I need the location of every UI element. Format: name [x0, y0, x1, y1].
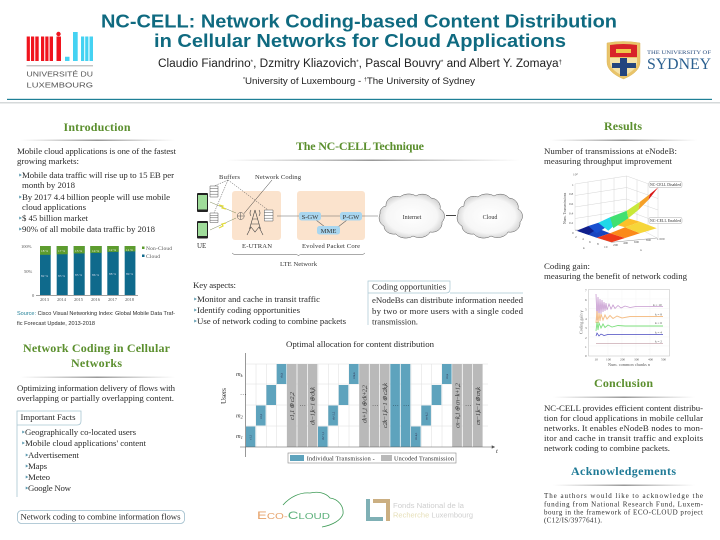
authors: , Dzmitry Kliazovich	[253, 58, 356, 70]
text: conclusion body: networks. It enables eNodeB nodes to mon-	[544, 423, 703, 433]
authors: *	[356, 60, 359, 66]
logo: University of Luxembourg: UNIVERSITÉ DU	[26, 70, 93, 78]
list: market facts: ‣	[18, 225, 23, 234]
list: key aspects: Identify coding opportunities	[197, 305, 301, 315]
bar chart: cloud vs non-cloud traffic: 83 %	[58, 274, 65, 278]
diagram labels: Buffers	[219, 174, 240, 181]
cell labels	[248, 372, 482, 440]
authors: *	[441, 60, 444, 66]
bar chart: cloud vs non-cloud traffic: 88 %	[109, 272, 116, 276]
line chart: coding gain: 500	[661, 358, 666, 362]
text: conclusion body	[544, 403, 704, 453]
bar chart: cloud vs non-cloud traffic: 0	[32, 293, 35, 298]
icon: network coding node	[237, 212, 244, 220]
line chart: coding gain: Num. common chunks n	[608, 362, 651, 367]
logo: University of Sydney: SYDNEY	[647, 56, 711, 73]
line chart: coding gain: 7	[585, 288, 587, 292]
diagram labels: Evolved Packet Core	[302, 243, 360, 250]
logo: Fonds National de la Recherche: Recherche Luxembourg	[393, 512, 473, 520]
cell labels: …	[392, 401, 399, 408]
line chart: coding gain: 6	[585, 298, 587, 302]
line chart: coding gain: 1	[585, 345, 587, 349]
bar chart: cloud vs non-cloud traffic: 2014	[57, 297, 67, 302]
text: conclusion body: tion for cloud applications in mobile cellular	[544, 413, 703, 423]
icon: buffers	[210, 186, 273, 222]
affiliations: University of Luxembourg -	[245, 76, 364, 87]
line chart: coding gain: 5	[585, 308, 587, 312]
chart axis labels: 800	[646, 238, 651, 242]
cloud: internet: Internet	[403, 215, 422, 221]
chart axis labels: n	[640, 248, 642, 252]
chart axis labels: 600	[634, 240, 639, 244]
text: acknowledgements body: The authors would like to acknowledge the	[544, 492, 703, 500]
chart axis labels: 200	[613, 243, 618, 247]
axis labels: 2	[241, 414, 244, 420]
brace: LTE network	[232, 253, 365, 256]
text: acknowledgements body: funding from National Research Fund, Luxem-	[544, 500, 704, 508]
chart axis labels: 1	[572, 183, 574, 187]
axes	[240, 353, 494, 457]
box: important facts: ‣	[21, 428, 26, 437]
k=6 curve	[596, 322, 663, 331]
bar chart: cloud vs non-cloud traffic	[21, 244, 172, 302]
MME node	[317, 226, 340, 235]
diagram labels: UE	[197, 242, 206, 250]
schedule legend	[288, 453, 456, 463]
diagram labels: Network Coding	[255, 174, 302, 181]
E-UTRAN region	[232, 191, 281, 240]
cell labels: …	[372, 401, 378, 408]
k=10 curve	[596, 294, 663, 320]
panel: network coding in cellular networks	[17, 341, 184, 524]
heading: technique: The NC-CELL Technique	[296, 139, 425, 153]
text: intro lead: growing markets:	[17, 156, 79, 166]
heading: network coding: Network Coding in Cellular	[23, 341, 171, 355]
text: acknowledgements body: (C12/IS/3977641).	[544, 516, 602, 524]
line chart: coding gain: k = 4	[655, 330, 662, 334]
disabled surface	[577, 187, 658, 235]
list: market facts: cloud applications	[22, 202, 87, 212]
text: conclusion body: network coding to combine packets.	[544, 443, 670, 453]
chart axis labels: 10	[604, 245, 608, 249]
cell labels: …	[465, 401, 471, 408]
header	[26, 10, 711, 90]
box: important facts: ‣	[24, 451, 29, 460]
title	[101, 10, 617, 51]
box: coding opportunities	[368, 281, 524, 326]
list: key aspects: Monitor and cache in transit traffic	[197, 294, 320, 304]
bar chart: cloud vs non-cloud traffic: 89 %	[126, 272, 133, 276]
text: conclusion body: itor and cache in transit traffic and exploits	[544, 433, 704, 443]
list: market facts: By 2017 4.4 billion people will use mobile	[22, 192, 170, 202]
text: optimizing delivery: Optimizing information delivery of flows with	[17, 383, 176, 393]
panel: conclusion	[544, 376, 704, 453]
box: important facts: Google Now	[28, 483, 72, 493]
cloud: internet	[379, 194, 444, 238]
heading: acknowledgements: Acknowledgements	[571, 464, 676, 478]
box: important facts: Geographically co-located users	[25, 427, 137, 437]
3D surface chart	[563, 172, 682, 252]
chart axis labels: 0.2	[569, 221, 574, 225]
icon: antenna tower	[247, 210, 263, 235]
bar chart: cloud vs non-cloud traffic: 2015	[74, 297, 84, 302]
chart axis labels: 8	[597, 242, 599, 246]
list: market facts: $ 45 billion market	[22, 213, 89, 223]
box: important facts	[17, 411, 147, 497]
axis labels: m	[236, 371, 241, 378]
line chart: coding gain: 2	[585, 336, 587, 340]
authors: *	[251, 60, 254, 66]
cell labels: …	[300, 401, 306, 408]
k=2 curve	[596, 342, 663, 344]
bar chart: cloud vs non-cloud traffic: 14 %	[92, 249, 99, 253]
affiliations: The University of Sydney	[367, 76, 475, 87]
box: important facts: ‣	[24, 462, 29, 471]
chart axis labels: 4	[582, 237, 584, 241]
authors: and Albert Y. Zomaya	[443, 58, 559, 70]
list: key aspects	[193, 280, 347, 326]
logo: University of Luxembourg	[26, 32, 93, 90]
k=4 curve	[596, 333, 663, 336]
affiliations: †	[364, 77, 367, 83]
affiliations: *	[243, 77, 245, 83]
list: market facts: month by 2018	[22, 180, 76, 190]
line chart: coding gain: 100	[606, 358, 611, 362]
line chart: coding gain: 400	[648, 358, 653, 362]
callout: network coding to combine: Network coding to combine information flows	[20, 512, 181, 522]
bar chart: cloud vs non-cloud traffic: 50%	[24, 269, 32, 274]
text: conclusion body: NC-CELL provides efficient content distribu-	[544, 403, 703, 413]
text: acknowledgements body	[544, 492, 704, 524]
list: market facts: ‣	[18, 171, 23, 180]
title: NC-CELL: Network Coding-based Content Distribution	[101, 10, 617, 32]
S-GW node	[299, 212, 321, 221]
bar chart: cloud vs non-cloud traffic: 17 %	[58, 249, 65, 253]
source note: Source: Cisco Visual Networking Index: Global Mobile Data Traf-	[17, 311, 175, 317]
schedule legend: Uncoded Transmission	[394, 456, 454, 462]
box: important facts: ‣	[21, 439, 26, 448]
axis labels: …	[240, 390, 246, 397]
chart axis labels: 6	[589, 240, 591, 244]
heading: network coding	[23, 341, 171, 370]
text: optimizing delivery: overlapping or partially overlapping content.	[17, 393, 174, 403]
header rule	[0, 99, 720, 104]
diagram labels	[197, 174, 360, 268]
cell labels: ck+2,2	[332, 411, 336, 420]
axis labels: 1	[241, 435, 243, 440]
chart axis labels: 1 000	[657, 237, 665, 241]
schedule chart: users over time	[219, 353, 498, 463]
logo: Fonds National de la Recherche	[366, 499, 473, 521]
logo: University of Sydney	[607, 42, 711, 79]
box: important facts: Meteo	[28, 472, 51, 482]
box: coding opportunities: transmission.	[372, 316, 418, 326]
axis labels: k	[241, 373, 244, 378]
authors: , Pascal Bouvry	[359, 58, 441, 70]
logo: ECO-Cloud: E CO- C LOUD	[257, 510, 330, 522]
cell labels: ck+1,1 ⊕ ck+2,2	[362, 384, 368, 423]
source note: fic Forecast Update, 2013-2018	[17, 321, 95, 327]
icon: user phones	[197, 193, 208, 238]
cell labels: c2k−1,k−1 ⊕ c2k,k	[382, 383, 389, 428]
line chart: coding gain: k = 2	[655, 340, 662, 344]
text: acknowledgements body: bourg in the framework of ECO-CLOUD project	[544, 508, 703, 516]
bar chart: cloud vs non-cloud traffic: 2018	[125, 297, 135, 302]
chart legend: Cloud	[146, 254, 160, 260]
axis labels: m	[236, 433, 241, 440]
chart callouts: NC-CELL Enabled	[650, 219, 681, 223]
evolved packet core region	[297, 191, 365, 240]
list: market facts: ‣	[18, 214, 23, 223]
list: key aspects: ‣	[193, 306, 198, 315]
cell labels: ck,k	[280, 372, 284, 378]
heading: results: Results	[604, 119, 642, 133]
network diagram: LTE network	[197, 174, 522, 268]
list: key aspects: ‣	[193, 295, 198, 304]
panel: introduction	[17, 120, 177, 327]
chart axis labels: 10⁴	[573, 172, 578, 176]
list: market facts: 90% of all mobile data traffic by 2018	[22, 224, 156, 234]
cell labels: ck+1,1	[321, 431, 326, 440]
line chart: coding gain: Coding gain γ	[578, 310, 584, 334]
MME node: MME	[321, 228, 336, 235]
panel: acknowledgements	[544, 464, 704, 524]
coded transmissions	[287, 364, 483, 447]
text: coding gain: measuring the benefit of network coding	[544, 271, 688, 281]
authors: Claudio Fiandrino	[158, 58, 248, 70]
chart callouts	[649, 182, 682, 224]
axis labels: m	[236, 412, 241, 420]
box: important facts: ‣	[24, 473, 29, 482]
line chart: coding gain: 0	[585, 354, 587, 358]
text: coding gain	[544, 261, 688, 281]
cell labels: cn-k,1	[414, 432, 419, 440]
axis labels: Users	[219, 388, 228, 404]
cell labels: ck−1,k−1 ⊕ ck,k	[310, 387, 316, 425]
box: important facts: Maps	[28, 461, 48, 471]
bar chart: cloud vs non-cloud traffic: 15 %	[75, 249, 82, 253]
list: key aspects: Use of network coding to combine packets	[197, 316, 347, 326]
list: market facts: ‣	[18, 193, 23, 202]
individual transmissions	[246, 364, 452, 447]
cell labels: cn,k	[445, 373, 450, 379]
title: in Cellular Networks for Cloud Applications	[154, 30, 566, 51]
box: coding opportunities: Coding opportunities	[372, 282, 447, 292]
text: optimizing delivery	[17, 383, 176, 403]
panel: the NC-CELL technique	[193, 139, 524, 527]
line chart: coding gain: 200	[620, 358, 625, 362]
axis labels	[219, 371, 498, 455]
chart axis labels: Num. Transmissions	[563, 192, 567, 224]
chart axis labels	[563, 172, 665, 252]
chart axis labels: 0	[572, 231, 574, 235]
bar chart: cloud vs non-cloud traffic: 2013	[40, 297, 50, 302]
chart axis labels: 0.8	[569, 192, 574, 196]
chart legend	[142, 246, 172, 260]
list: key aspects: Key aspects:	[193, 280, 236, 290]
cell labels: c2k,k	[352, 372, 357, 379]
chart axis labels: 0.4	[569, 212, 574, 216]
bar chart: cloud vs non-cloud traffic: 12 %	[109, 248, 116, 252]
cell labels: c2,2	[259, 413, 264, 419]
text: intro lead: Mobile cloud applications is one of the fastest	[17, 146, 177, 156]
cell labels: c1,1	[248, 434, 254, 440]
text: number of transmissions: Number of transmissions at eNodeB:	[544, 146, 677, 156]
heading: network coding: Networks	[71, 356, 122, 370]
chart callouts: NC-CELL Disabled	[650, 183, 681, 187]
chart axis labels: 0.6	[569, 202, 574, 206]
text: number of transmissions	[544, 146, 677, 166]
bar chart: cloud vs non-cloud traffic: 100%	[21, 244, 32, 249]
cell labels: cn-k,2	[424, 412, 430, 420]
cloud: cloud: Cloud	[483, 215, 497, 221]
bar chart: cloud vs non-cloud traffic: 11 %	[126, 248, 133, 252]
logo: Fonds National de la Recherche: Fonds National de la	[393, 503, 464, 510]
line chart: coding gain: 10	[594, 358, 598, 362]
chart axis labels: 400	[623, 241, 628, 245]
heading: introduction: Introduction	[64, 120, 131, 134]
chart axis labels: k	[583, 246, 585, 250]
source note	[17, 311, 175, 327]
box: important facts: ‣	[24, 484, 29, 493]
heading: conclusion: Conclusion	[594, 376, 653, 390]
cell labels: cn−k,1 ⊕ cn−k+1,2	[454, 382, 462, 428]
list: key aspects: ‣	[193, 317, 198, 326]
diagram labels: E-UTRAN	[242, 243, 272, 250]
text: coding gain: Coding gain:	[544, 261, 590, 271]
logo: University of Luxembourg: LUXEMBOURG	[26, 80, 93, 90]
k=8 curve	[596, 311, 663, 323]
logo: ECO-Cloud	[257, 492, 343, 527]
line chart: coding gain: 4	[585, 317, 587, 321]
schedule legend: Individual Transmission -	[307, 456, 375, 462]
bar chart: cloud vs non-cloud traffic: 2017	[108, 297, 118, 302]
panel: results	[544, 119, 697, 367]
P-GW node: P-GW	[343, 214, 360, 221]
cloud: cloud	[457, 194, 522, 238]
line chart: coding gain: k = 6	[655, 321, 662, 325]
chart legend: Non-Cloud	[146, 246, 172, 252]
line chart: coding gain: 3	[585, 326, 587, 330]
line chart: coding gain: k = 10	[653, 303, 662, 307]
text: optimal allocation caption: Optimal allocation for content distribution	[286, 339, 435, 349]
bar chart: cloud vs non-cloud traffic: 2016	[91, 297, 101, 302]
line chart: coding gain: k = 8	[655, 312, 662, 316]
authors: †	[559, 60, 562, 66]
box: coding opportunities: by two or more users with a single coded	[372, 306, 524, 316]
bar chart: cloud vs non-cloud traffic: 85 %	[75, 273, 82, 277]
bar chart: cloud vs non-cloud traffic: 82 %	[41, 274, 48, 278]
list: market facts	[18, 170, 174, 234]
axis labels: t	[496, 448, 498, 455]
P-GW node	[340, 212, 362, 221]
line chart: coding gain	[578, 288, 670, 367]
box: important facts: Mobile cloud applications' content	[25, 438, 147, 448]
diagram labels: LTE Network	[280, 261, 318, 268]
text: intro lead	[17, 146, 177, 166]
cell labels: …	[403, 401, 409, 408]
logo: University of Sydney: THE UNIVERSITY OF	[647, 50, 711, 56]
bar chart: cloud vs non-cloud traffic: 18 %	[41, 249, 48, 253]
enabled surface	[577, 218, 657, 242]
bar chart: cloud vs non-cloud traffic: 86 %	[92, 273, 99, 277]
S-GW node: S-GW	[302, 214, 319, 221]
list: market facts: Mobile data traffic will rise up to 15 EB per	[22, 170, 174, 180]
wireless links	[210, 180, 272, 230]
cell labels: cn−1,k−1 ⊕ cn,k	[475, 387, 482, 425]
chart axis labels: 2	[575, 235, 577, 239]
text: number of transmissions: measuring throughput improvement	[544, 156, 673, 166]
box: coding opportunities: eNodeBs can distribute information needed	[372, 295, 524, 305]
box: important facts: Important Facts	[20, 412, 76, 422]
cell labels: c1,1 ⊕ c2,2	[289, 391, 296, 420]
box: important facts: Advertisement	[28, 450, 80, 460]
line chart: coding gain: 300	[634, 358, 639, 362]
